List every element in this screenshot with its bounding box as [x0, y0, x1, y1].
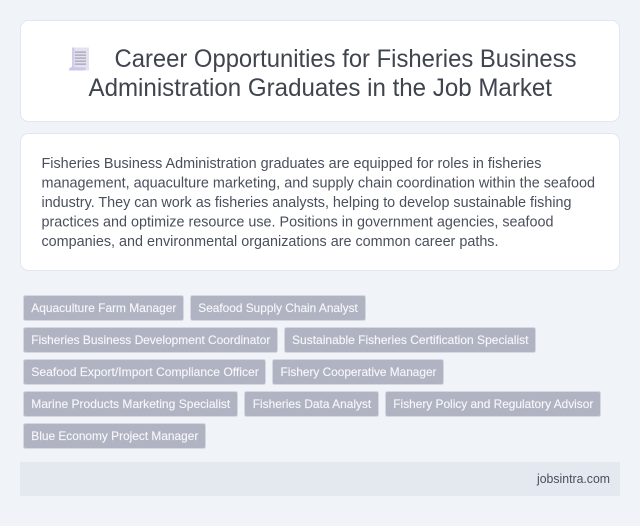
description text: industry. They can work as fisheries analysts, helping to develop sustainable fishing — [42, 195, 572, 211]
tag list — [24, 296, 600, 448]
tag — [386, 392, 600, 416]
tag — [272, 360, 444, 384]
description text: companies, and environmental organizations are common career paths. — [42, 234, 498, 250]
tag: Fishery Cooperative Manager — [280, 365, 436, 379]
tag — [24, 328, 278, 352]
tag — [244, 392, 378, 416]
tag: Fisheries Data Analyst — [253, 397, 372, 411]
tag: Blue Economy Project Manager — [31, 429, 198, 443]
tag — [24, 296, 184, 320]
description text: practices and optimize resource use. Positions in government agencies, seafood — [42, 214, 554, 230]
panel: description — [20, 134, 620, 270]
tag — [190, 296, 366, 320]
tag — [24, 424, 206, 448]
footer — [20, 462, 620, 496]
icon: document scroll — [69, 48, 89, 70]
tag: Marine Products Marketing Specialist — [31, 397, 231, 411]
panel: title card — [20, 20, 620, 122]
tag: Seafood Export/Import Compliance Officer — [31, 365, 259, 379]
tag — [24, 392, 238, 416]
title — [88, 45, 576, 102]
tag: Fisheries Business Development Coordinator — [31, 333, 270, 347]
tag: Sustainable Fisheries Certification Specialist — [292, 333, 529, 347]
tag — [24, 360, 266, 384]
tag: Seafood Supply Chain Analyst — [198, 301, 358, 315]
description text — [42, 156, 595, 250]
title: Administration Graduates in the Job Market — [88, 74, 552, 102]
tag: Aquaculture Farm Manager — [31, 301, 176, 315]
description text: Fisheries Business Administration graduates are equipped for roles in fisheries — [42, 156, 542, 172]
tag: Fishery Policy and Regulatory Advisor — [393, 397, 593, 411]
title: Career Opportunities for Fisheries Business — [114, 45, 576, 73]
footer source: jobsintra.com — [536, 472, 610, 486]
description text: management, aquaculture marketing, and supply chain coordination within the seafood — [42, 176, 595, 192]
tag — [284, 328, 536, 352]
